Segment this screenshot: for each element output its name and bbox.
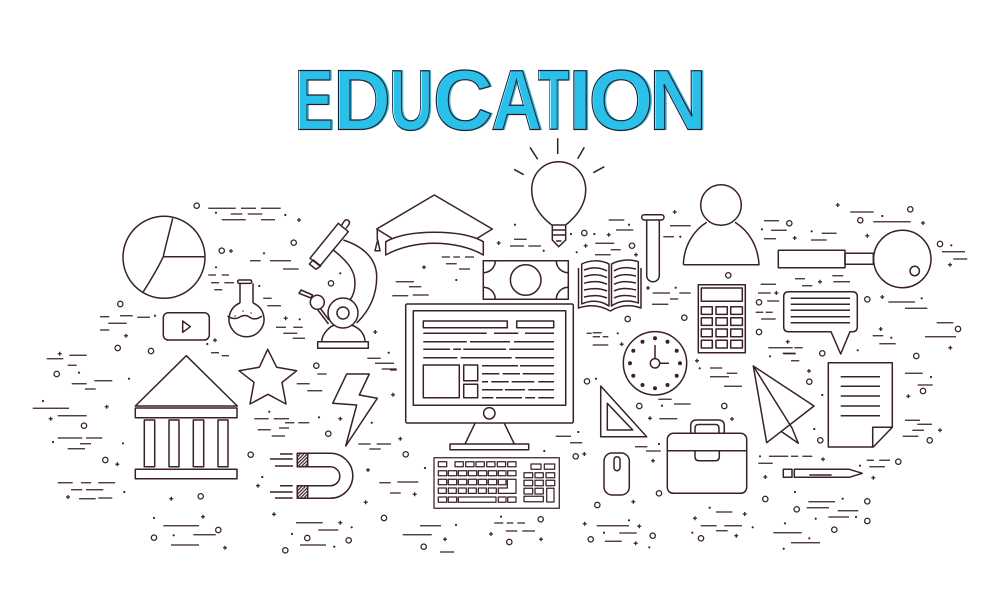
icon: set square: [601, 386, 647, 437]
icon: paper plane: [753, 366, 814, 443]
icon: test tube: [642, 215, 664, 282]
icon: magnifier: [778, 230, 931, 288]
title: A: [493, 52, 543, 148]
title: I: [570, 54, 593, 148]
icon: desktop monitor: [406, 304, 573, 450]
icon: pie chart: [123, 216, 205, 298]
title: I: [568, 54, 592, 148]
icon: wall clock: [623, 332, 687, 395]
title: [295, 52, 708, 148]
icon: document: [828, 363, 892, 447]
title: C: [434, 53, 495, 148]
title: U: [389, 53, 433, 148]
icon: keyboard: [434, 458, 559, 508]
icon: graduation cap: [375, 195, 492, 255]
title: D: [333, 53, 391, 148]
icon: speech bubble: [784, 292, 857, 354]
icon: magnet: [270, 453, 353, 498]
decorative dashes: [33, 208, 967, 552]
title: T: [538, 53, 569, 148]
title: N: [651, 53, 708, 148]
icon: calculator: [698, 285, 745, 353]
icon: light bulb: [514, 138, 604, 247]
title: C: [433, 53, 493, 148]
decorative plus signs: [49, 203, 952, 550]
decorative dots: [43, 213, 951, 549]
title: T: [539, 53, 571, 148]
icon: flask: [228, 280, 264, 337]
title: O: [589, 53, 653, 148]
icon: bank building: [135, 356, 237, 479]
icon: lightning bolt: [333, 374, 377, 446]
decorative small circles: [54, 203, 961, 553]
icon: mouse: [604, 453, 629, 495]
title: D: [335, 53, 392, 148]
title: E: [296, 53, 335, 148]
icon: star: [239, 349, 297, 404]
icon: video player: [163, 313, 209, 340]
title: O: [590, 53, 655, 148]
icon: microscope: [299, 220, 377, 348]
icon: banknote: [483, 261, 568, 299]
icon: pencil: [783, 469, 862, 477]
title: A: [491, 52, 542, 148]
title: N: [649, 53, 707, 148]
icon: open book: [578, 260, 641, 311]
title: E: [295, 53, 333, 148]
icon: person: [683, 185, 759, 265]
title: U: [390, 53, 435, 148]
icon: briefcase: [667, 420, 747, 493]
